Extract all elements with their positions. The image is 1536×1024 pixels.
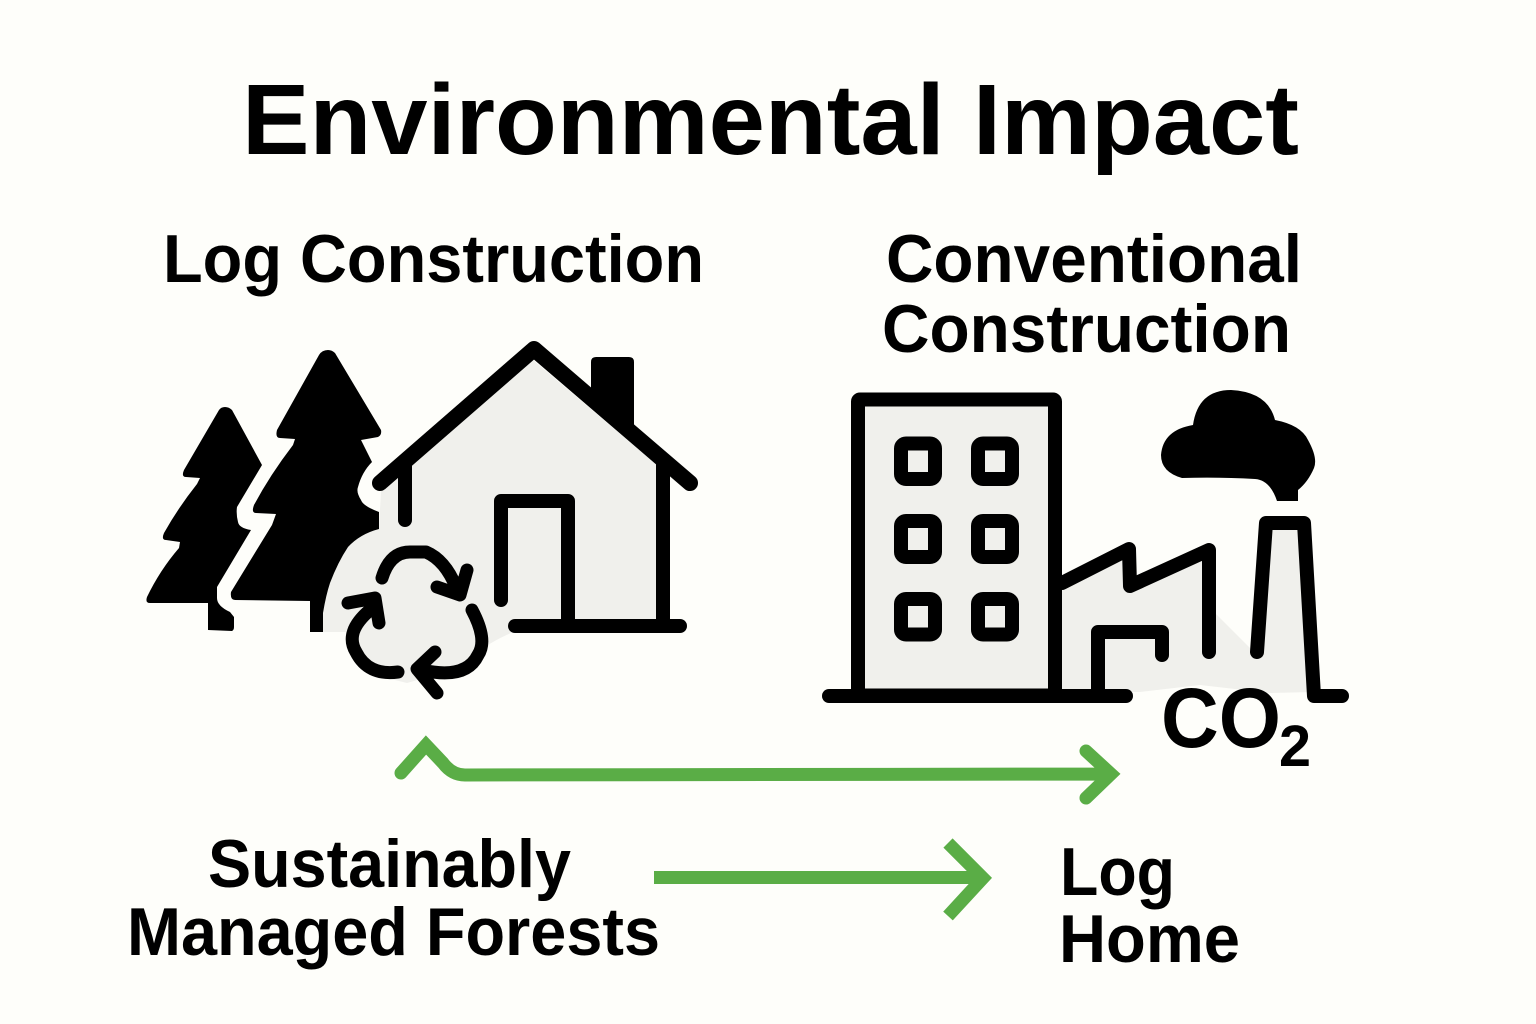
heading: log construction: Log Construction xyxy=(163,221,704,297)
heading: conventional construction: Construction xyxy=(882,291,1291,367)
factory door xyxy=(1098,632,1162,695)
icon: small tree xyxy=(146,407,262,631)
heading: conventional construction: Conventional xyxy=(886,221,1302,297)
icon: factory background tint xyxy=(1062,530,1314,693)
panel: log construction illustration xyxy=(146,349,690,693)
door xyxy=(501,501,568,626)
icon: smoke cloud xyxy=(1161,390,1315,501)
title: Environmental Impact xyxy=(242,64,1299,176)
panel: conventional construction illustration xyxy=(829,390,1342,779)
building body xyxy=(858,400,1055,696)
floor line xyxy=(515,619,680,633)
recycling arrow top xyxy=(382,552,467,595)
label: sustainably managed forests: Sustainably xyxy=(208,826,571,902)
building windows xyxy=(901,444,1012,634)
chimney xyxy=(591,357,634,432)
icon: large tree xyxy=(231,350,381,632)
house walls xyxy=(405,465,663,626)
label: log home xyxy=(1059,834,1240,977)
icon: office building xyxy=(858,400,1055,696)
icon: recycling arrows xyxy=(348,552,482,693)
label: sustainably managed forests: Managed Forests xyxy=(127,894,660,970)
label: CO2: CO xyxy=(1161,671,1281,765)
recycling arrow left xyxy=(348,598,398,673)
label: sustainably managed forests xyxy=(127,826,660,970)
icon: factory and chimney xyxy=(829,523,1342,696)
icon: house xyxy=(380,349,690,626)
roof xyxy=(380,349,690,483)
label: log home: Log xyxy=(1060,834,1175,910)
arrow: long green arrow xyxy=(401,745,1111,798)
icon: house and recycling background tint xyxy=(323,360,663,683)
recycling arrow right xyxy=(417,610,482,693)
factory roof xyxy=(1062,549,1209,652)
label: log home: Home xyxy=(1059,901,1240,977)
ground line xyxy=(829,689,1126,703)
heading: conventional construction xyxy=(882,221,1302,367)
smokestack xyxy=(1257,523,1342,696)
label: CO2: 2 xyxy=(1279,714,1311,779)
arrow: forests to log home xyxy=(654,843,983,916)
